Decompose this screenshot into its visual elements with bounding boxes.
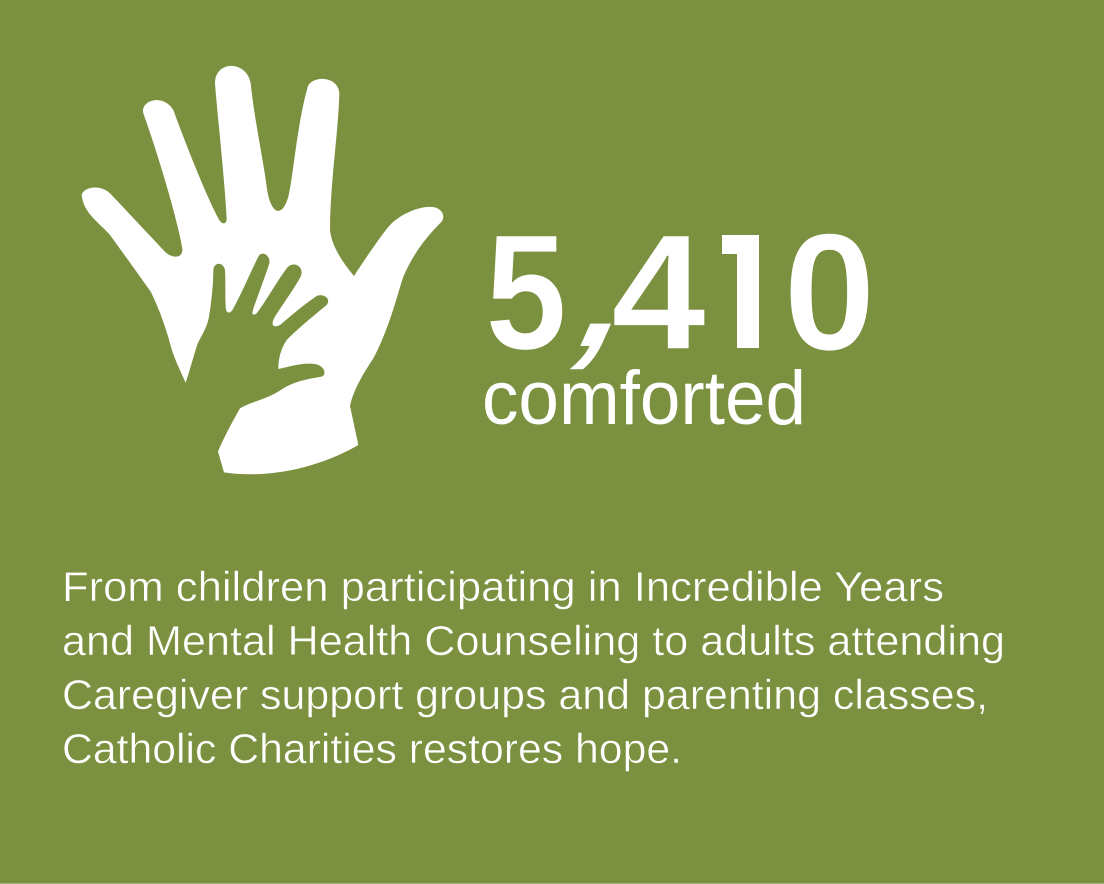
big number: 5,410: 5	[485, 200, 567, 384]
body text	[62, 563, 1005, 772]
big number: 5,410: 4	[611, 200, 706, 384]
body text: and Mental Health Counseling to adults attending	[62, 617, 1005, 664]
big number: 5,410: 1	[704, 199, 785, 383]
body text: Catholic Charities restores hope.	[62, 725, 682, 772]
body text: From children participating in Incredible Years	[62, 563, 944, 610]
icon: adult hand holding child hand	[82, 66, 443, 474]
big number: 5,410	[490, 234, 868, 370]
big number: 5,410: 0	[783, 198, 876, 386]
big number: 5,410: ,	[556, 212, 671, 378]
body text: Caregiver support groups and parenting classes,	[62, 671, 988, 718]
label: comforted: comforted	[482, 356, 806, 441]
